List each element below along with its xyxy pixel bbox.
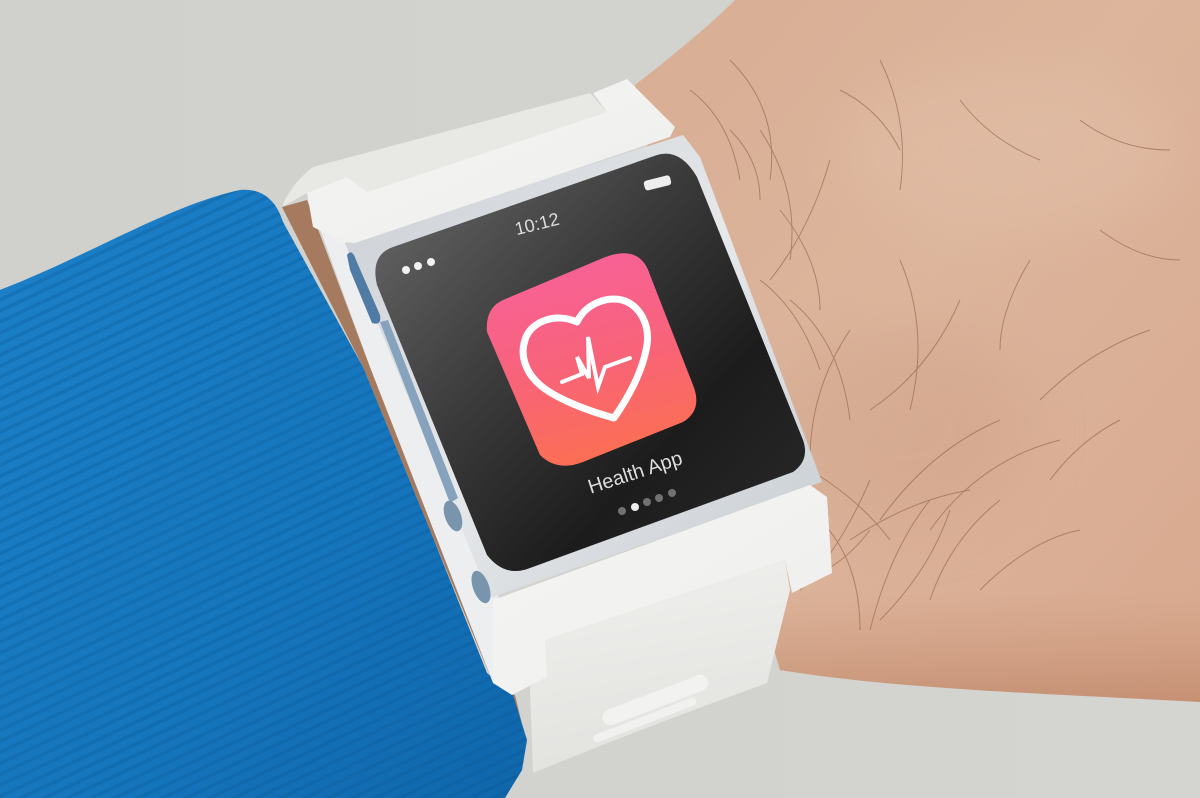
forearm skin bbox=[282, 0, 1200, 745]
smartwatch bbox=[282, 79, 832, 773]
icon: health app heart bbox=[487, 253, 696, 466]
app label: Health App bbox=[585, 447, 685, 499]
status: battery bbox=[643, 175, 672, 191]
metal case bbox=[345, 135, 822, 598]
page dots bbox=[618, 489, 676, 515]
top strap behind lug bbox=[282, 93, 607, 207]
screen bbox=[375, 154, 805, 571]
status: time: 10:12 bbox=[513, 209, 561, 239]
status: menu dots bbox=[402, 258, 435, 274]
side buttons bbox=[347, 252, 494, 606]
top lug bbox=[307, 79, 675, 243]
white side of case bbox=[307, 193, 500, 683]
steel side strip bbox=[380, 320, 458, 503]
arm hair bbox=[690, 60, 1180, 630]
lower case lug bbox=[493, 485, 832, 695]
bottom strap bbox=[530, 560, 790, 773]
strap slots bbox=[592, 673, 710, 744]
blue sweater sleeve bbox=[0, 190, 527, 798]
wrist wedge beside sleeve bbox=[282, 200, 527, 745]
